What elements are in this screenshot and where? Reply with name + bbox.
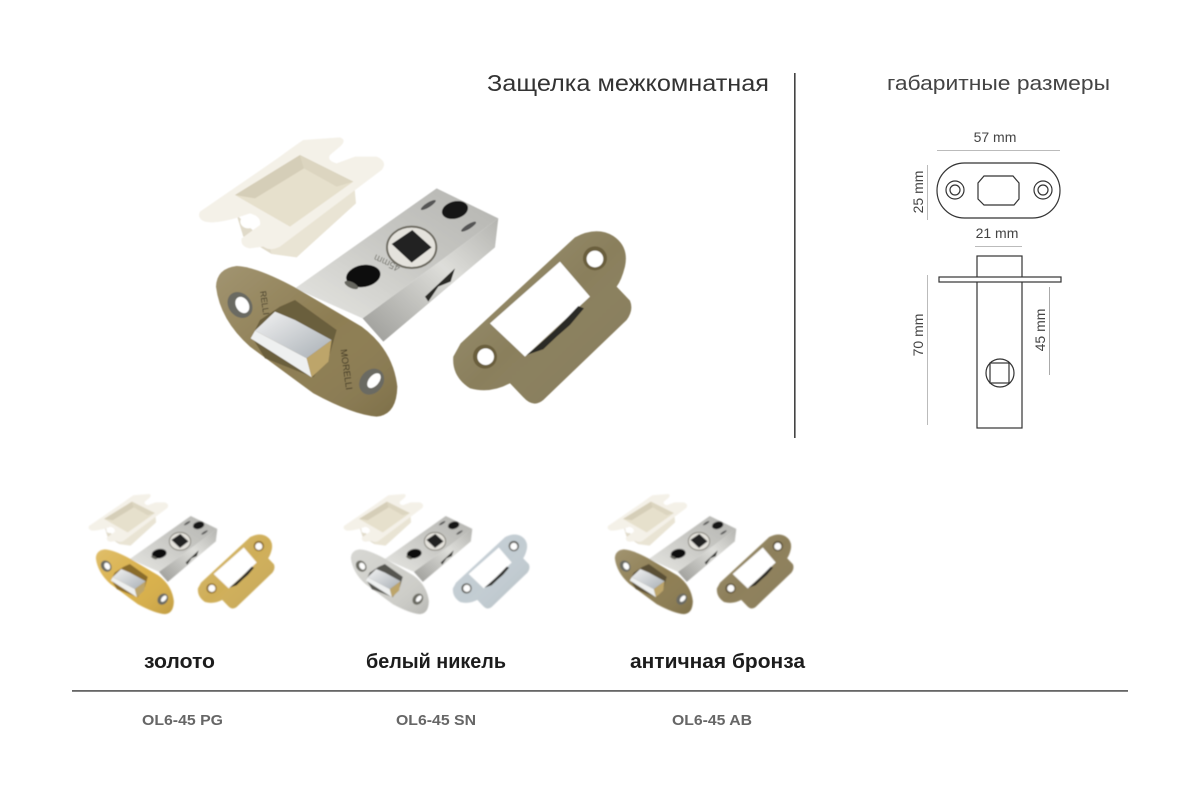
vertical divider xyxy=(794,73,796,438)
dimension: 45 mm xyxy=(1032,287,1050,375)
icon: right screw hole xyxy=(1034,181,1052,199)
dimension drawing: faceplate front view xyxy=(937,163,1060,218)
dimension: 25 mm: 25 mm xyxy=(910,171,926,213)
icon: latch opening xyxy=(978,176,1019,205)
engraving: brand on faceplate: MORELLI xyxy=(338,349,354,391)
dimension drawing: side view xyxy=(939,256,1061,428)
dimension: 25 mm xyxy=(910,165,928,220)
dimension: 57 mm xyxy=(937,129,1060,151)
horizontal rule xyxy=(72,690,1128,692)
dimension: 70 mm: 70 mm xyxy=(910,314,926,356)
article code: white nickel: OL6-45 SN xyxy=(396,712,476,729)
icon: spindle hole xyxy=(986,359,1014,387)
dimension: 57 mm: 57 mm xyxy=(974,129,1016,145)
heading: overall dimensions: габаритные размеры xyxy=(887,73,1110,95)
article code: antique bronze: OL6-45 AB xyxy=(672,712,752,729)
dimension: 21 mm: 21 mm xyxy=(976,225,1018,241)
icon: left screw hole xyxy=(946,181,964,199)
engraving: brand on faceplate top: RELLI xyxy=(258,290,271,316)
label: white nickel: белый никель xyxy=(366,651,506,673)
variant image: antique bronze xyxy=(608,494,793,614)
dimension: 21 mm xyxy=(975,225,1022,247)
title: product name: Защелка межкомнатная xyxy=(487,70,769,96)
variant image: gold xyxy=(89,494,274,614)
dimension: 45 mm: 45 mm xyxy=(1032,309,1048,351)
variant image: white nickel xyxy=(344,494,529,614)
engraving: size on case: 45mm xyxy=(372,251,402,273)
article code: gold: OL6-45 PG xyxy=(142,712,223,729)
label: gold: золото xyxy=(144,651,215,673)
main product image: latch in antique bronze xyxy=(199,137,631,417)
label: antique bronze: античная бронза xyxy=(630,651,806,673)
